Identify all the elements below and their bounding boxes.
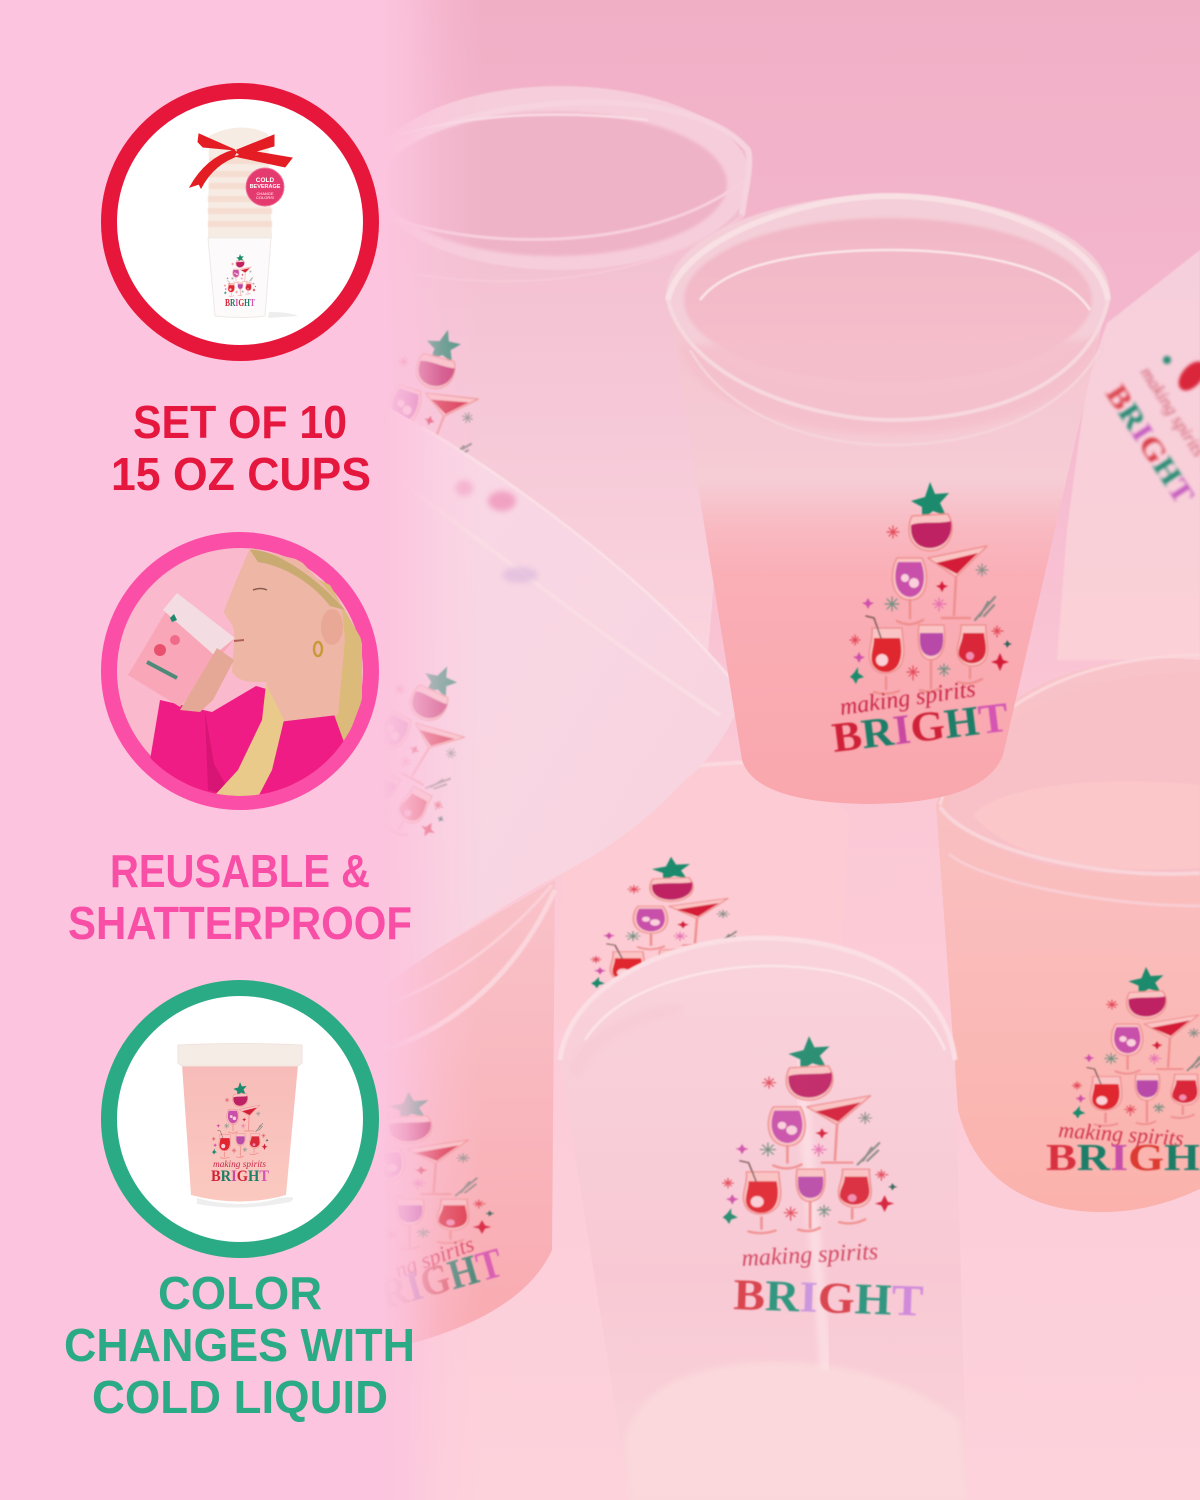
cup: left, tipped on its side — [392, 410, 734, 966]
logo: bottom centre cup — [723, 1036, 924, 1326]
logo: right cup: making spirits — [1058, 1117, 1184, 1151]
background photo — [390, 0, 1200, 1500]
logo: main cup: BRIGHT — [830, 695, 1011, 762]
logo: right cup: BRIGH — [1046, 1137, 1200, 1179]
logo: bottom centre cup: making spirits — [741, 1239, 879, 1272]
logo: bottom left cup: ng spirits — [391, 1231, 477, 1283]
tag: cold beverage: CHANGE — [256, 191, 274, 196]
cup: centre, main with pink drink — [666, 195, 1110, 804]
logo: bottom centre cup: BRIGHT — [733, 1270, 924, 1326]
logo: tipped cup — [392, 666, 466, 836]
photo: stacked cups: BRIGHT — [225, 298, 255, 309]
photo: woman — [128, 548, 362, 800]
tag: cold beverage: COLD — [256, 177, 275, 184]
cup: bottom left with pink drink — [390, 880, 556, 1343]
photo: single cup — [178, 1044, 302, 1208]
reflected print seen through tipped cup — [455, 480, 538, 583]
badge: woman drinking from cup — [109, 540, 371, 802]
tag: cold beverage — [246, 168, 284, 206]
heading: colour changes with cold liquid: CHANGES WITH — [64, 1319, 415, 1371]
heading: colour changes with cold liquid: COLD LIQUID — [92, 1371, 388, 1423]
badge: boxed set of cups — [109, 91, 371, 353]
photo: single cup: BRIGHT — [211, 1168, 269, 1185]
logo: bottom left cup: RIGHT — [375, 1240, 508, 1319]
logo: right cup — [1046, 967, 1200, 1179]
photo: single cup: making spirits — [213, 1160, 266, 1170]
photo: stacked cups — [190, 127, 298, 318]
heading: reusable and shatterproof: REUSABLE & — [110, 845, 370, 897]
heading: set of 10 — [111, 396, 371, 500]
cup: top right, tilted — [1057, 250, 1200, 660]
logo: middle cup — [590, 856, 738, 989]
logo: top left cup — [392, 330, 480, 453]
cup: right with pink drink — [936, 655, 1200, 1212]
heading: set of 10: 15 OZ CUPS — [111, 448, 371, 500]
heading: colour changes with cold liquid: COLOR — [158, 1267, 322, 1319]
heading: colour changes with cold liquid — [64, 1267, 415, 1423]
heading: reusable and shatterproof — [68, 845, 412, 949]
logo: main cup — [830, 482, 1012, 762]
left pink panel with fade — [0, 0, 482, 1500]
cup: middle, behind — [590, 760, 744, 989]
badge: colour changing cup — [109, 988, 371, 1250]
tag: cold beverage: COLORS! — [256, 195, 274, 200]
logo: bottom left cup — [390, 1092, 500, 1302]
tag: cold beverage: BEVERAGE — [250, 184, 281, 190]
heading: set of 10: SET OF 10 — [133, 396, 347, 448]
heading: reusable and shatterproof: SHATTERPROOF — [68, 897, 412, 949]
cup: top left, empty and frosted — [393, 86, 752, 651]
ribbon bow — [190, 134, 292, 188]
cup: bottom centre, upside view and frosted — [558, 936, 958, 1376]
logo: main cup: making spirits — [838, 676, 977, 721]
logo: top right cup: BRIGHT — [1099, 379, 1200, 510]
